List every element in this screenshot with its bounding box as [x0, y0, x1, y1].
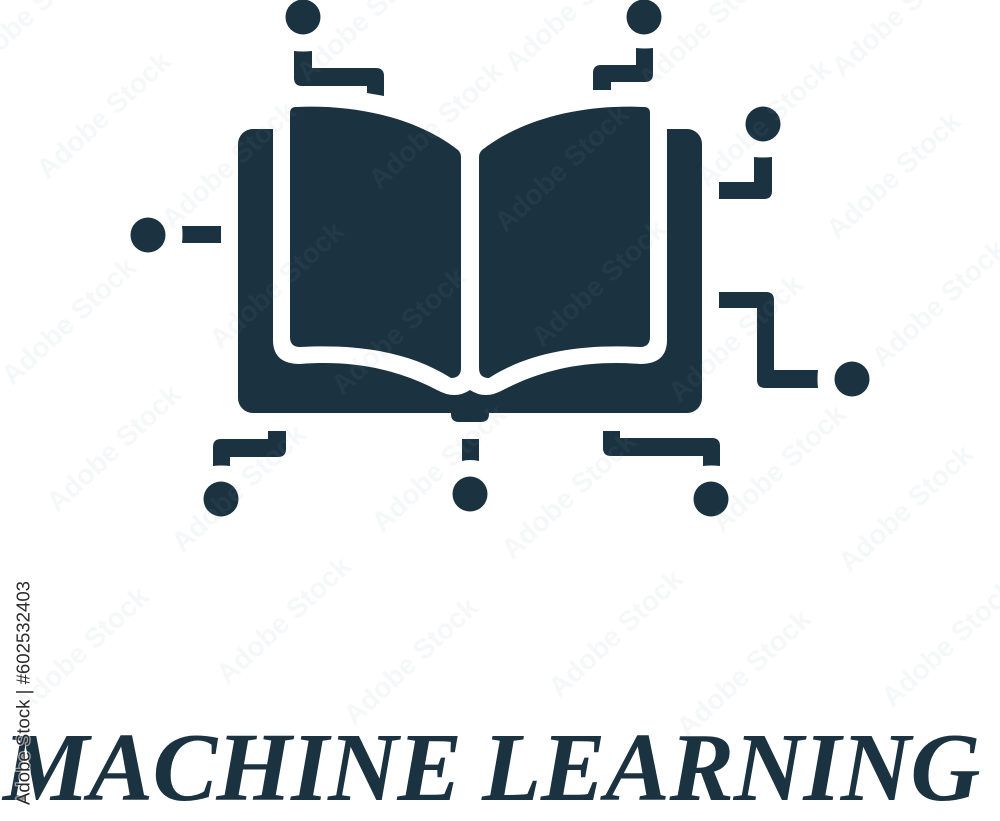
stock watermarks: Adobe Stock: [488, 98, 635, 238]
right page: [479, 107, 650, 378]
stock watermarks: Adobe Stock: [40, 378, 187, 518]
stock watermarks: Adobe Stock: [8, 580, 155, 720]
stock watermarks: Adobe Stock: [670, 603, 817, 743]
stock watermarks: Adobe Stock: [155, 95, 302, 235]
icon: open book: [238, 100, 702, 422]
node: left: [130, 218, 221, 252]
left page: [290, 107, 461, 378]
node: top left: [286, 0, 384, 96]
stock watermarks: Adobe Stock: [30, 45, 177, 185]
node: right lower: [719, 292, 870, 396]
stock watermarks: Adobe Stock: [365, 398, 512, 538]
stock watermarks: Adobe Stock: [325, 261, 472, 401]
stock watermarks: Adobe Stock: [165, 418, 312, 558]
node: bottom centre: [452, 439, 488, 512]
white gap around pages: [273, 100, 667, 395]
node: top right: [593, 0, 662, 90]
stock watermarks: Adobe Stock: [542, 563, 689, 703]
node: bottom left: [204, 431, 286, 516]
stock watermarks: Adobe Stock: [362, 55, 509, 195]
stock watermarks: Adobe Stock: [832, 438, 979, 578]
title: LEARNING: [481, 714, 980, 821]
stock watermarks: Adobe Stock: [705, 398, 852, 538]
vertical stock id caption: Adobe Stock | #602532403: [12, 581, 34, 805]
book back cover: [238, 129, 702, 413]
stock watermarks: Adobe Stock: [210, 550, 357, 690]
stock watermarks: Adobe Stock: [203, 215, 350, 355]
title: MACHINE: [1, 714, 461, 821]
node: bottom right: [603, 431, 728, 516]
stock watermarks: Adobe Stock: [337, 591, 484, 731]
stock watermarks: Adobe Stock: [495, 425, 642, 565]
stock watermarks: Adobe Stock: [820, 105, 967, 245]
stock watermarks: Adobe Stock: [662, 268, 809, 408]
node: right upper: [719, 106, 780, 199]
stock watermarks: Adobe Stock: [690, 53, 837, 193]
icon: open book with circuit nodes: [130, 0, 870, 516]
book spine tab: [451, 410, 489, 422]
stock watermarks: Adobe Stock: [525, 213, 672, 353]
